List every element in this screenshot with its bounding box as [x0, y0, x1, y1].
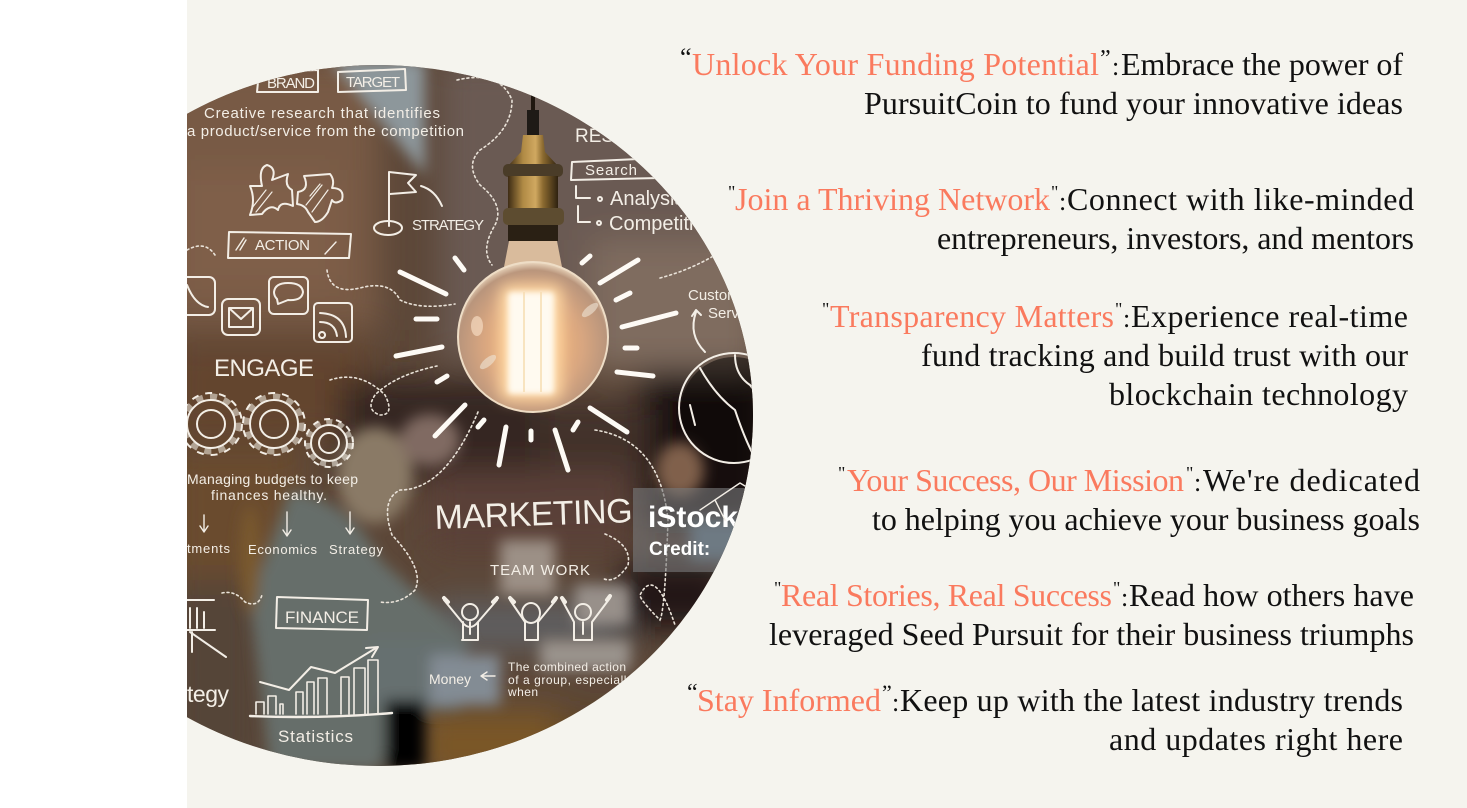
label: creative research caption: Creative research that identifies: [204, 105, 440, 122]
text block: unlock your funding potential: [680, 43, 1403, 121]
label: brand and target boxes: [257, 69, 406, 92]
text block: your success, our mission: Your Success, Our Mission: [847, 462, 1184, 498]
text block: unlock your funding potential: “: [680, 43, 692, 72]
text block: transparency matters: Transparency Matters: [830, 298, 1114, 334]
icon: strategy flag: [374, 172, 484, 235]
text block: join a thriving network: entrepreneurs, investors, and mentors: [937, 220, 1414, 256]
label: customer service: Customer: [688, 287, 753, 304]
light rays: [396, 256, 676, 470]
text block: join a thriving network: :: [1059, 187, 1066, 216]
text block: join a thriving network: [728, 181, 1414, 256]
text block: stay informed: ”: [882, 680, 892, 705]
label: finance box: [276, 597, 368, 630]
label: marketing: MARKETING: [434, 492, 633, 537]
label: customer service: [688, 290, 737, 353]
label: action banner: [228, 232, 351, 258]
text block: your success, our mission: ": [1186, 463, 1193, 483]
text block: your success, our mission: to helping you achieve your business goals: [872, 501, 1420, 537]
label: research search list: RESEARCH: [575, 126, 681, 147]
icon: presentation easel: tegy: [187, 681, 230, 707]
label: money and team caption: The combined action: [508, 660, 626, 674]
iStock watermark: Credit:: [649, 539, 710, 560]
statistics chart: [250, 647, 392, 746]
text block: stay informed: :: [892, 688, 899, 717]
label: action banner: ACTION: [255, 237, 310, 254]
text block: join a thriving network: Join a Thriving Network: [735, 181, 1050, 217]
text block: stay informed: [687, 680, 1403, 757]
text block: real stories, real success: Read how others have: [1129, 577, 1414, 613]
text block: stay informed: “: [687, 680, 698, 706]
text block: real stories, real success: leveraged Seed Pursuit for their business triumphs: [769, 616, 1414, 652]
arrows and labels under budgets: [187, 512, 384, 557]
text block: real stories, real success: ": [774, 578, 781, 598]
photo: blurred backdrop: [187, 65, 753, 766]
text block: unlock your funding potential: PursuitCoin to fund your innovative ideas: [864, 85, 1403, 121]
text block: unlock your funding potential: :: [1112, 52, 1119, 81]
label: managing budgets caption: finances healthy.: [211, 487, 327, 503]
text block: transparency matters: ": [1115, 299, 1122, 319]
iStock watermark: [633, 482, 746, 572]
text block: unlock your funding potential: Unlock Your Funding Potential: [692, 46, 1099, 82]
arrows and labels under budgets: tments: [187, 541, 230, 556]
text block: real stories, real success: ": [1113, 578, 1120, 598]
text block: real stories, real success: [769, 577, 1414, 652]
label: money and team caption: Money: [429, 671, 471, 687]
icon: team of three people: [444, 596, 610, 640]
text block: join a thriving network: ": [728, 182, 735, 202]
light bulb: [458, 241, 608, 412]
arrows and labels under budgets: Economics: [248, 542, 318, 557]
label: finance box: FINANCE: [285, 608, 359, 627]
text block: your success, our mission: [838, 462, 1420, 537]
circular marketing photo: [187, 65, 753, 766]
text block: transparency matters: [822, 298, 1408, 412]
text block: transparency matters: ": [822, 299, 829, 319]
label: money and team caption: of a group, especially: [508, 673, 633, 687]
label: customer service: Service: [708, 305, 758, 322]
label: money and team caption: when: [507, 685, 538, 699]
text block: stay informed: Stay Informed: [697, 682, 881, 718]
label: engage: ENGAGE: [214, 355, 314, 382]
iStock watermark: iStock: [648, 501, 738, 534]
bulb cord and brass socket: [503, 95, 564, 241]
text block: unlock your funding potential: Embrace the power of: [1121, 46, 1403, 82]
text block: your success, our mission: ": [838, 463, 845, 483]
label: research search list: Analysis: [610, 188, 684, 210]
label: creative research caption: [187, 105, 464, 140]
dotted doodle paths: [187, 78, 715, 625]
text block: real stories, real success: Real Stories, Real Success: [781, 577, 1112, 613]
icons: phone, mail, chat, rss: [170, 277, 352, 342]
text block: transparency matters: fund tracking and build trust with our: [921, 337, 1408, 373]
label: managing budgets caption: Managing budgets to keep: [187, 471, 358, 487]
text block: real stories, real success: :: [1121, 583, 1128, 612]
text block: transparency matters: :: [1123, 304, 1130, 333]
icons: three gears: [180, 393, 353, 467]
label: managing budgets caption: [188, 474, 358, 503]
text block: unlock your funding potential: ”: [1100, 46, 1111, 72]
text block: join a thriving network: ": [1051, 182, 1058, 202]
arrows and labels under budgets: Strategy: [329, 542, 384, 557]
label: team work: TEAM WORK: [490, 562, 590, 579]
label: research search list: Competition: [609, 213, 716, 235]
text block: transparency matters: Experience real-time: [1131, 298, 1408, 334]
label: brand and target boxes: TARGET: [346, 74, 400, 91]
label: research search list: [570, 128, 692, 234]
label: creative research caption: a product/service from the competition: [187, 123, 464, 140]
statistics chart: Statistics: [278, 727, 353, 746]
icon: puzzle pieces: [250, 165, 343, 222]
label: research search list: Search: [585, 162, 637, 179]
text block: stay informed: Keep up with the latest industry trends: [900, 682, 1403, 718]
label: brand and target boxes: BRAND: [267, 75, 315, 92]
label: money and team caption: [430, 662, 626, 696]
icon: globe: [678, 352, 753, 464]
icon: strategy flag: STRATEGY: [412, 217, 484, 234]
text block: your success, our mission: :: [1194, 468, 1201, 497]
text block: transparency matters: blockchain technology: [1109, 376, 1408, 412]
text block: your success, our mission: We're dedicated: [1203, 462, 1420, 498]
icon: presentation easel: [187, 599, 229, 707]
text block: stay informed: and updates right here: [1109, 721, 1403, 757]
text block: join a thriving network: Connect with like-minded: [1067, 181, 1414, 217]
